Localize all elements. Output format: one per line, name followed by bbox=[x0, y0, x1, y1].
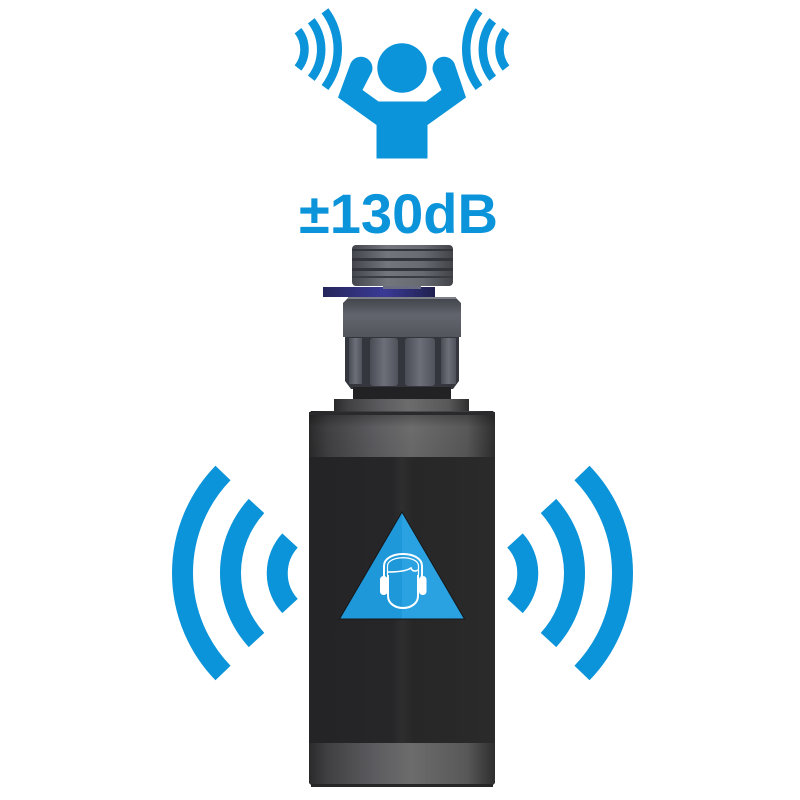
device: collar bbox=[334, 387, 469, 411]
icon: hearing protection warning triangle bbox=[340, 512, 464, 619]
icon: small sound waves left bbox=[298, 11, 338, 87]
device: connector thread bbox=[352, 245, 453, 286]
icon: person with raised arms bbox=[338, 43, 466, 158]
device: blue locking plate bbox=[323, 286, 435, 297]
icon: small sound waves right bbox=[466, 11, 506, 87]
heading: decibel rating: ±130dB bbox=[299, 182, 498, 245]
device: main cylinder body bbox=[309, 411, 495, 787]
icon: large sound waves left bbox=[182, 473, 290, 673]
icon: large sound waves right bbox=[515, 473, 623, 673]
icon: head with ear defenders bbox=[380, 554, 426, 608]
device: connector nut bbox=[343, 297, 461, 337]
device: fluted grip bbox=[345, 337, 459, 389]
